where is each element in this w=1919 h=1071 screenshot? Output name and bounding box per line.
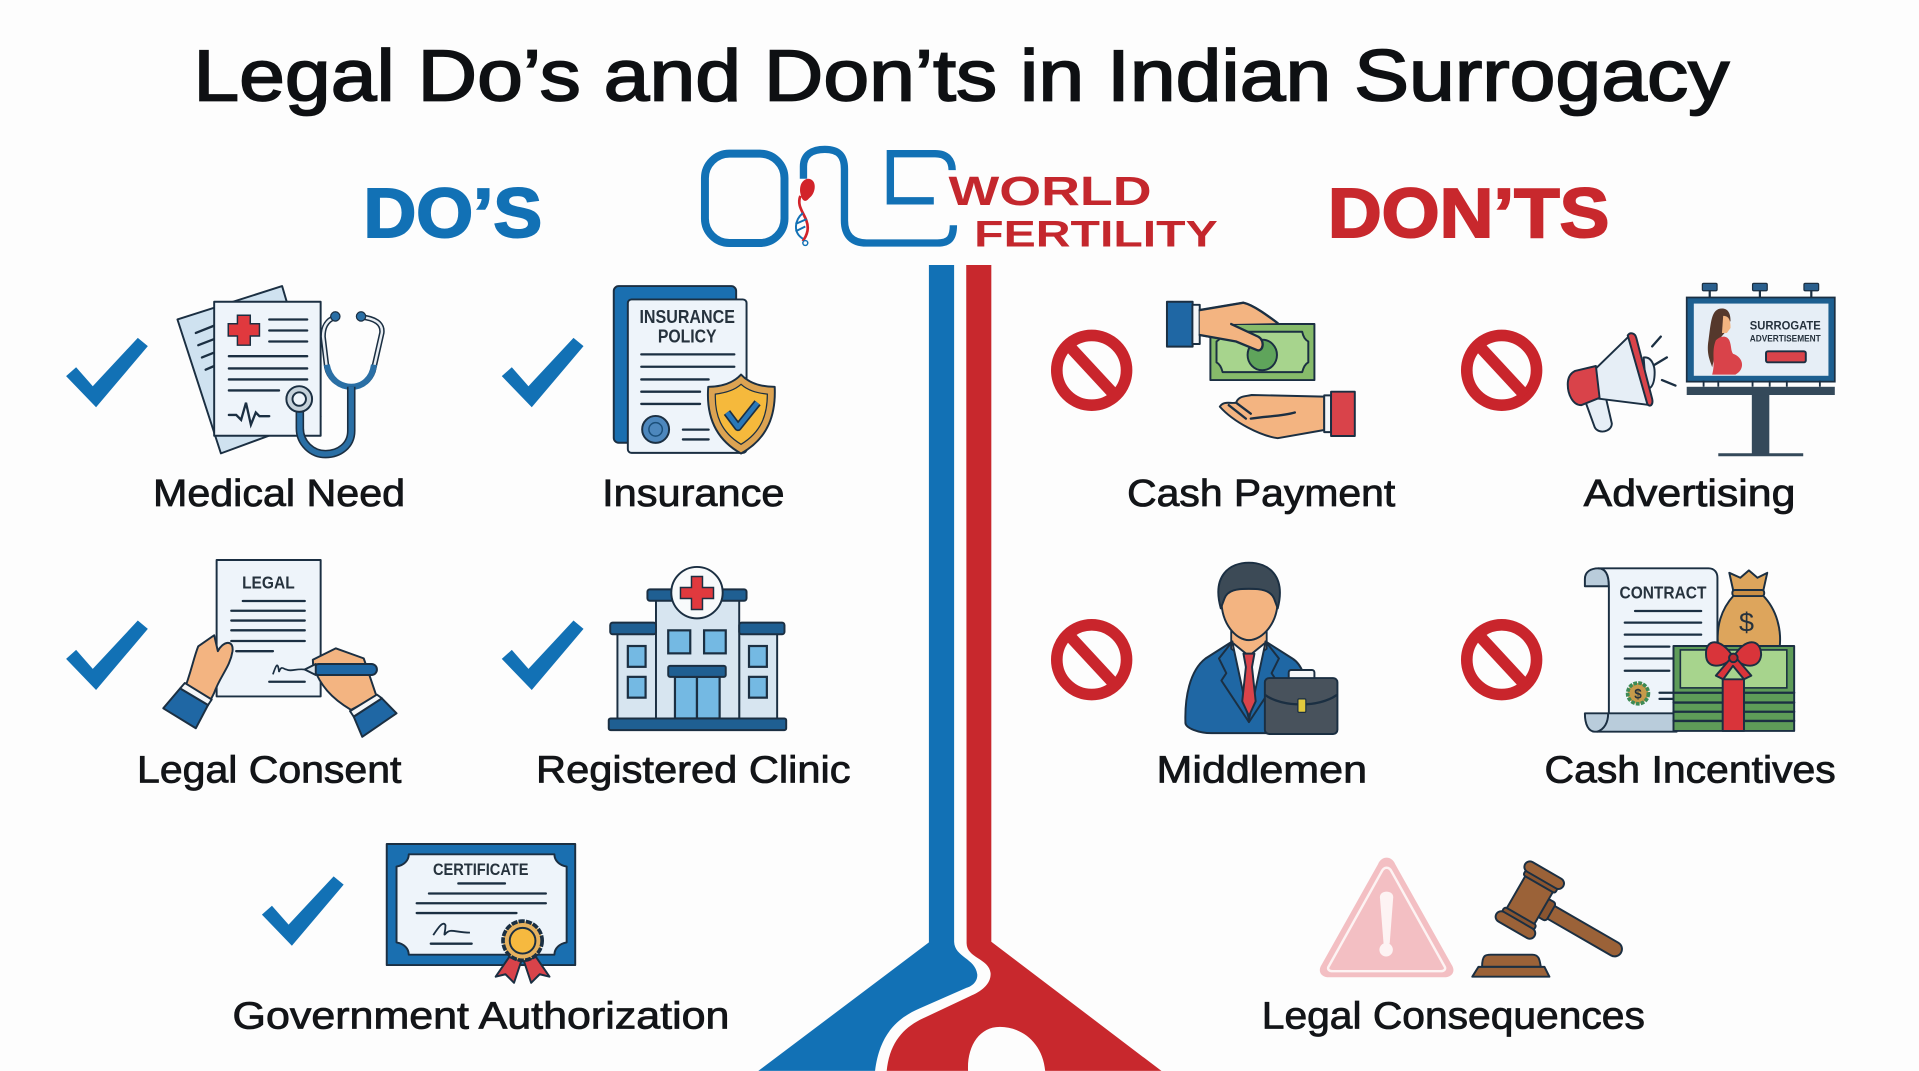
label: legal consent: Legal Consent bbox=[137, 750, 402, 792]
prohibited: middlemen bbox=[1057, 625, 1127, 695]
logo: One World Fertility bbox=[705, 149, 1218, 255]
icon: signing legal document bbox=[163, 560, 397, 737]
icon: gavel bbox=[1472, 859, 1638, 982]
icon: megaphone and billboard bbox=[1568, 283, 1835, 455]
check: insurance bbox=[502, 338, 584, 407]
label: registered clinic: Registered Clinic bbox=[536, 750, 851, 792]
panel: do's bbox=[66, 286, 851, 1038]
prohibited: cash payment bbox=[1057, 335, 1127, 405]
label: government authorization: Government Authorization bbox=[233, 996, 729, 1038]
central divider: blue and red bars bbox=[758, 265, 1161, 1071]
icon: signing legal document: LEGAL bbox=[242, 573, 295, 593]
icon: insurance policy with shield bbox=[614, 286, 775, 454]
logo: One World Fertility: WORLD bbox=[948, 168, 1152, 214]
icon: insurance policy with shield: POLICY bbox=[658, 326, 717, 347]
icon: contract, money bag and cash: $ bbox=[1739, 608, 1754, 638]
logo: One World Fertility: FERTILITY bbox=[974, 214, 1218, 255]
icon: contract, money bag and cash: CONTRACT bbox=[1620, 583, 1707, 603]
label: legal consequences: Legal Consequences bbox=[1262, 996, 1645, 1038]
icon: middleman with briefcase bbox=[1185, 563, 1337, 734]
check: legal consent bbox=[66, 621, 148, 690]
icon: faded warning triangle bbox=[1320, 858, 1453, 977]
icon: insurance policy with shield: INSURANCE bbox=[639, 306, 735, 327]
panel: don'ts bbox=[1057, 283, 1836, 1038]
prohibited: advertising bbox=[1467, 335, 1537, 405]
check: government authorization bbox=[262, 876, 344, 946]
label: cash incentives: Cash Incentives bbox=[1545, 750, 1836, 792]
icon: medical documents and stethoscope bbox=[177, 286, 382, 454]
label: cash payment: Cash Payment bbox=[1127, 473, 1396, 515]
prohibited: cash incentives bbox=[1467, 625, 1537, 695]
icon: megaphone and billboard: SURROGATE bbox=[1750, 318, 1821, 332]
icon: clinic building bbox=[609, 567, 786, 730]
icon: contract, money bag and cash bbox=[1585, 568, 1794, 732]
label: medical need: Medical Need bbox=[153, 473, 405, 515]
check: medical need bbox=[66, 338, 148, 407]
title: Legal Do’s and Don’ts in Indian Surrogacy bbox=[193, 36, 1729, 116]
icon: megaphone and billboard: ADVERTISEMENT bbox=[1750, 334, 1821, 344]
icon: certificate with seal: CERTIFICATE bbox=[433, 860, 528, 879]
icon: cash payment hands bbox=[1167, 302, 1355, 438]
icon: certificate with seal bbox=[387, 844, 575, 983]
label: middlemen: Middlemen bbox=[1157, 750, 1367, 792]
label: advertising: Advertising bbox=[1584, 473, 1795, 515]
icon: contract, money bag and cash: $ bbox=[1634, 686, 1642, 701]
heading: do's: DO’S bbox=[363, 174, 542, 252]
heading: don'ts: DON’TS bbox=[1328, 174, 1609, 252]
label: insurance: Insurance bbox=[602, 473, 784, 515]
check: registered clinic bbox=[502, 621, 584, 690]
